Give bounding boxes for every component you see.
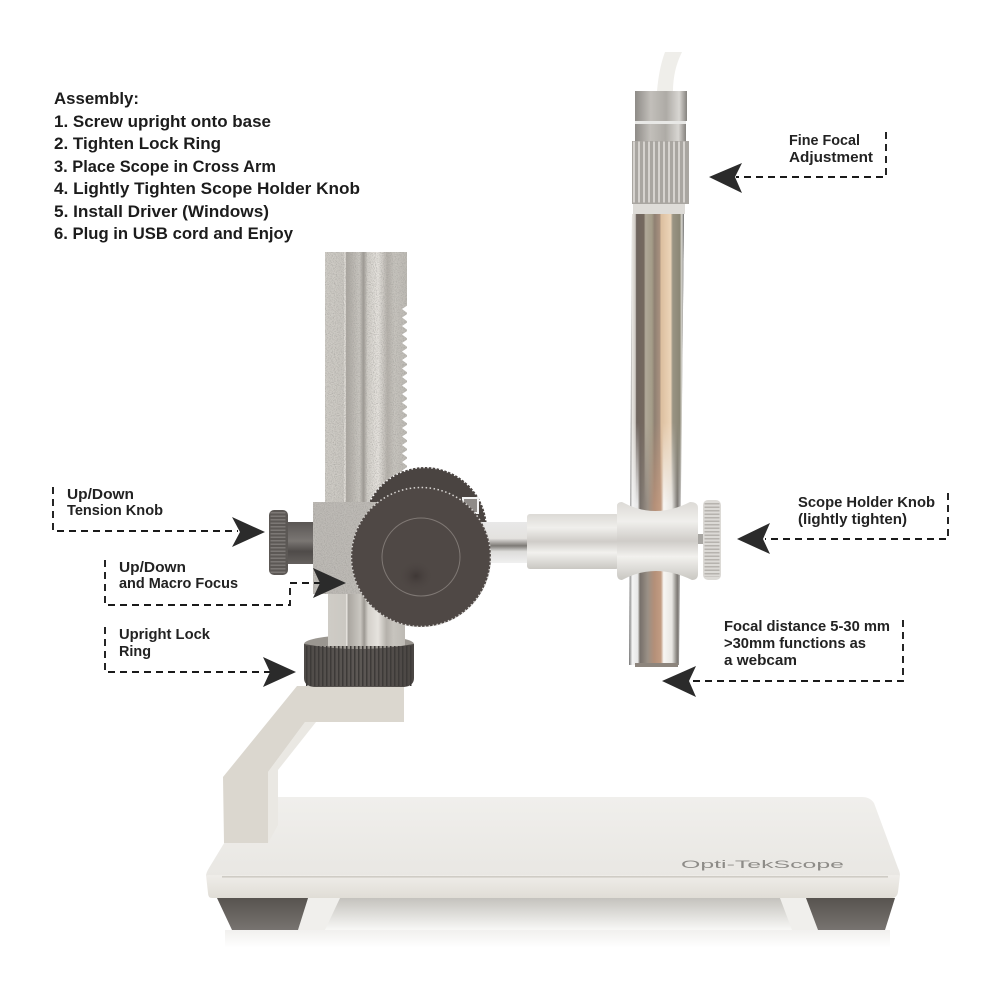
panel: assembly instructions: Assembly: xyxy=(54,89,139,108)
up/down tension knob xyxy=(269,510,315,575)
upright lock ring xyxy=(304,630,414,687)
top cap xyxy=(635,91,687,121)
fine focal knurled ring xyxy=(632,141,689,214)
callout: focal distance xyxy=(662,618,903,697)
panel: assembly instructions: 6. Plug in USB cord and Enjoy xyxy=(54,224,294,243)
callout: upright lock ring: Ring xyxy=(119,643,151,660)
scope holder knob xyxy=(703,500,721,580)
panel: assembly instructions: 4. Lightly Tighten Scope Holder Knob xyxy=(54,179,360,198)
callout: focal distance: >30mm functions as xyxy=(724,635,866,652)
callout: up/down and macro focus xyxy=(105,559,346,605)
scope holder arm xyxy=(527,500,721,580)
lower column xyxy=(328,590,405,642)
right rubber foot xyxy=(806,898,895,930)
chrome tube xyxy=(629,214,684,667)
callout: scope holder knob xyxy=(737,493,948,554)
microscope scope xyxy=(629,52,689,667)
panel: assembly instructions: 1. Screw upright onto base xyxy=(54,112,271,131)
rack teeth xyxy=(402,305,408,484)
brand text on base: Opti-TekScope xyxy=(681,859,844,871)
panel: assembly instructions: 3. Place Scope in Cross Arm xyxy=(54,157,276,176)
callout: focal distance: a webcam xyxy=(724,652,797,669)
callout: focal distance: Focal distance 5-30 mm xyxy=(724,618,890,635)
USB cable xyxy=(657,52,682,91)
rear focus knob xyxy=(363,467,487,591)
callout: fine focal adjustment: Adjustment xyxy=(789,149,873,166)
callout: upright lock ring xyxy=(105,626,296,687)
rack column xyxy=(325,252,408,502)
callout: fine focal adjustment xyxy=(709,132,886,193)
callout: fine focal adjustment: Fine Focal xyxy=(789,132,860,149)
callout: up/down tension knob xyxy=(53,486,265,547)
panel: assembly instructions: 5. Install Driver (Windows) xyxy=(54,202,269,221)
callout: scope holder knob: Scope Holder Knob xyxy=(798,494,935,511)
callout: up/down and macro focus: and Macro Focus xyxy=(119,575,238,592)
cross arm rod xyxy=(478,522,528,563)
callout: up/down and macro focus: Up/Down xyxy=(119,559,186,576)
panel: assembly instructions: 2. Tighten Lock Ring xyxy=(54,134,221,153)
base plate xyxy=(206,797,900,948)
big focus knob xyxy=(351,487,491,627)
left rubber foot xyxy=(217,898,308,930)
panel: assembly instructions xyxy=(54,89,360,243)
callout: upright lock ring: Upright Lock xyxy=(119,626,211,643)
L-shaped bracket xyxy=(223,686,404,843)
mount block xyxy=(313,502,395,594)
microscope stand illustration xyxy=(206,52,900,948)
callout: up/down tension knob: Tension Knob xyxy=(67,502,163,519)
callout: up/down tension knob: Up/Down xyxy=(67,486,134,503)
callout: scope holder knob: (lightly tighten) xyxy=(798,511,907,528)
